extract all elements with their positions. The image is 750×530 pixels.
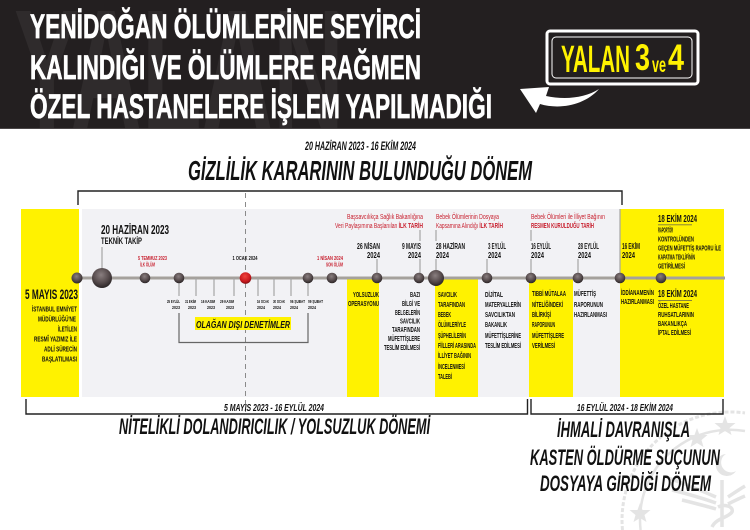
event: müfettiş raporu (574, 289, 607, 319)
dates above timeline: 28 EYLÜL (578, 241, 599, 251)
red label: last death (317, 255, 343, 268)
event: savcılık talebi: TALEBİ (438, 372, 452, 381)
title: YENİDOĞAN ÖLÜMLERİNE SEYİRCİ (30, 8, 421, 46)
red note: data sharing: Başsavcılıkça Sağlık Bakanlığına (347, 214, 423, 221)
inspection dates: 09 ŞUBAT (308, 299, 323, 305)
panel: background columns (21, 209, 724, 397)
inspection dates: 2023 (172, 305, 180, 311)
callout: olağan dışı denetimler (195, 317, 291, 331)
badge: yalan 3 ve 4: 3 (635, 37, 650, 78)
text block: 5 mayıs 2023: 5 MAYIS 2023 (25, 286, 78, 302)
event: 18 ekim ruhsat: BAKANLIKÇA (658, 319, 687, 328)
red note: data sharing: Veri Paylaşımına Başlanılan İLK TARİH (335, 222, 423, 230)
event: 18 ekim rapor: RAPORTÖR (658, 226, 673, 234)
event: savcılık talebi: İLLİYET BAĞININ (438, 351, 471, 360)
event: bilgi ve belgeler: TESLİM EDİLMESİ (384, 343, 420, 352)
inspection dates: 25 EYLÜL (167, 298, 180, 305)
text block: teknik takip: 20 HAZİRAN 2023 (101, 222, 169, 237)
event: 18 ekim ruhsat: ÖZEL HASTANE (658, 301, 689, 310)
event: savcılık talebi: SAVCILIK (438, 290, 457, 299)
divider: new year 2024 (244, 193, 246, 412)
dates above timeline: 2024 (531, 250, 544, 260)
red label: first death: 5 TEMMUZ 2023 (138, 256, 167, 262)
event: tıbbi mütalaa: TIBBİ MÜTALAA (532, 289, 566, 298)
arrow: curved to headline (520, 87, 599, 113)
event: tıbbi mütalaa: MÜFETTİŞLERE (532, 331, 564, 340)
badge: yalan 3 ve 4 (547, 31, 698, 84)
red note: causality: Bebek Ölümleri ile İlliyet Bağının (531, 212, 605, 221)
event: tıbbi mütalaa: RAPORUNUN (532, 320, 555, 329)
event: 18 ekim rapor: KONTROLÜNDEN (658, 234, 694, 244)
inspection dates: 16 OCAK (257, 299, 269, 305)
red note: causality: RESMEN KURULDUĞU TARİH (531, 221, 594, 230)
callout: olağan dışı denetimler: OLAĞAN DIŞI DENETİMLER (196, 318, 290, 331)
event: 18 ekim ruhsat: RUHSATLARININ (658, 310, 694, 319)
event: iddianame (621, 288, 654, 306)
negligence period date: 16 EYLÜL 2024 - 18 EKİM 2024 (577, 401, 673, 414)
inspection dates: 2024 (290, 305, 298, 311)
dates above timeline: 3 EYLÜL (488, 241, 506, 251)
badge: yalan 3 ve 4: 4 (668, 37, 684, 78)
bracket: fraud period (26, 399, 528, 414)
dates above timeline: 2024 (622, 250, 635, 260)
dates above timeline: 16 EYLÜL (531, 241, 551, 251)
timeline (72, 209, 725, 296)
event: yolsuzluk operasyonu: YOLSUZLUK (353, 290, 379, 299)
inspection dates: 2023 (207, 305, 215, 311)
event: bilgi ve belgeler: SAVCILIK (400, 316, 420, 326)
inspection dates: 2024 (308, 305, 316, 311)
event: 18 ekim ruhsat: İPTAL EDİLMESİ (658, 328, 691, 337)
event: iddianame: HAZIRLANMASI (621, 297, 654, 306)
dates above timeline: 28 HAZİRAN (436, 241, 465, 251)
event: müfettiş raporu: MÜFETTİŞ (574, 289, 596, 298)
inspection dates: 30 OCAK (273, 299, 285, 305)
text block: 5 mayıs 2023: MÜDÜRLÜĞÜ'NE (38, 314, 76, 324)
event: savcılık talebi: FİİLLERİ ARASINDA (438, 341, 476, 350)
event: tıbbi mütalaa (532, 289, 566, 350)
title: KALINDIĞI VE ÖLÜMLERE RAĞMEN (30, 49, 421, 87)
event: bilgi ve belgeler: BELGELERİN (395, 308, 420, 317)
secrecy period date: 20 HAZİRAN 2023 - 16 EKİM 2024 (304, 140, 416, 153)
inspection dates: 31 EKİM (185, 298, 196, 305)
event: tıbbi mütalaa: NİTELİĞİNDEKİ (532, 300, 563, 309)
inspection dates: 2023 (188, 305, 196, 311)
watermark: ministry emblem (622, 412, 745, 530)
text block: 5 mayıs 2023 (25, 286, 78, 364)
event: yolsuzluk operasyonu (348, 290, 379, 308)
bracket: secrecy period (78, 191, 622, 205)
event: yolsuzluk operasyonu: OPERASYONU (348, 299, 379, 308)
event: bilgi ve belgeler (384, 290, 420, 352)
red label: first death: İLK ÖLÜM (140, 262, 155, 268)
heading: negligence period (530, 417, 721, 496)
header band (0, 0, 750, 165)
event: bilgi ve belgeler: BİLGİ VE (402, 299, 420, 308)
event: bilgi ve belgeler: MÜFETTİŞLERE (388, 334, 420, 343)
dates above timeline: 16 EKİM (622, 241, 640, 251)
dates above timeline: 2024 (436, 250, 449, 260)
event: dijital materyaller: TESLİM EDİLMESİ (485, 341, 521, 350)
text block: 5 mayıs 2023: BAŞLATILMASI (42, 354, 77, 364)
event: dijital materyaller: SAVCILIKTAN (485, 310, 515, 319)
event: müfettiş raporu: HAZIRLANMASI (574, 310, 607, 319)
text block: teknik takip (101, 222, 169, 247)
fraud period date: 5 MAYIS 2023 - 16 EYLÜL 2024 (224, 401, 324, 414)
dates above timeline: 2024 (488, 250, 501, 260)
event: 18 ekim ruhsat: 18 EKİM 2024 (658, 287, 697, 300)
badge: yalan 3 ve 4: ve (652, 54, 666, 77)
title (30, 8, 492, 126)
inspection dates: 29 KASIM (220, 299, 234, 305)
text block: 5 mayıs 2023: ADLİ SÜRECİN (44, 344, 77, 354)
label: 1 ocak 2024: 1 OCAK 2024 (232, 256, 258, 262)
event: 18 ekim rapor: GETİRİLMESİ (658, 262, 685, 270)
event: savcılık talebi (438, 290, 476, 381)
event: dijital materyaller (485, 290, 521, 350)
text block: teknik takip: TEKNİK TAKİP (101, 236, 142, 247)
bracket: extraordinary inspections (179, 313, 308, 342)
badge: yalan 3 ve 4: YALAN (561, 39, 630, 81)
event: savcılık talebi: TARAFINDAN (438, 300, 465, 309)
title: ÖZEL HASTANELERE İŞLEM YAPILMADIĞI (30, 88, 492, 126)
heading: fraud period: NİTELİKLİ DOLANDIRICILIK / YOLSUZLUK DÖNEMİ (119, 414, 431, 439)
event: 18 ekim rapor: 18 EKİM 2024 (658, 212, 697, 225)
event: 18 ekim rapor: KAPATMA TEKLİFİNİN (658, 252, 695, 262)
inspection dates (167, 298, 323, 311)
dates above timeline: 2024 (367, 250, 380, 260)
red label: last death: SON ÖLÜM (326, 262, 343, 268)
event: savcılık talebi: ŞÜPHELİLERİN (438, 331, 466, 340)
inspection dates: 2023 (226, 305, 234, 311)
dates above timeline: 2024 (578, 250, 591, 260)
event: bilgi ve belgeler: BAZI (410, 290, 420, 299)
red note: case scope: Kapsamına Alındığı İLK TARİH (436, 222, 503, 230)
event: 18 ekim ruhsat (658, 287, 697, 337)
text block: 5 mayıs 2023: İLETİLEN (58, 324, 77, 334)
dates above timeline: 26 NİSAN (357, 241, 380, 251)
event: savcılık talebi: İNCELENMESİ (438, 362, 465, 371)
red label: last death: 1 NİSAN 2024 (317, 255, 343, 262)
red note: causality (531, 212, 605, 230)
text block: 5 mayıs 2023: İSTANBUL EMNİYET (32, 304, 77, 314)
event: savcılık talebi: BEBEK (438, 310, 451, 319)
event: savcılık talebi: ÖLÜMLERİYLE (438, 320, 466, 329)
event: dijital materyaller: DİJİTAL (485, 290, 503, 299)
event: tıbbi mütalaa: VERİLMESİ (532, 341, 555, 350)
dates above timeline: 9 MAYIS (402, 241, 421, 251)
red label: first death (138, 256, 167, 268)
event: müfettiş raporu: RAPORUNUN (574, 300, 603, 309)
event: bilgi ve belgeler: TARAFINDAN (392, 325, 420, 334)
event: dijital materyaller: MÜFETTİŞLERİNE (485, 331, 521, 340)
inspection dates: 06 ŞUBAT (290, 299, 305, 305)
event: iddianame: İDDİANAMENİN (621, 288, 654, 297)
event: tıbbi mütalaa: BİLİRKİŞİ (532, 310, 551, 319)
text block: 5 mayıs 2023: RESMÎ YAZIMIZ İLE (34, 334, 77, 344)
inspection dates: 16 KASIM (201, 299, 215, 305)
timeline dots (72, 268, 666, 288)
red note: data sharing (335, 214, 423, 230)
event: dijital materyaller: MATERYALLERİN (485, 300, 521, 309)
event: dijital materyaller: BAKANLIK (485, 320, 507, 329)
inspection dates: 2024 (257, 305, 265, 311)
red note: case scope (436, 213, 503, 230)
dates above timeline (357, 241, 640, 260)
dates above timeline: 2024 (408, 250, 421, 260)
bracket: negligence period (531, 399, 723, 414)
event: 18 ekim rapor (658, 212, 721, 270)
red note: case scope: Bebek Ölümlerinin Dosyaya (436, 213, 499, 221)
inspection dates: 2024 (273, 305, 281, 311)
